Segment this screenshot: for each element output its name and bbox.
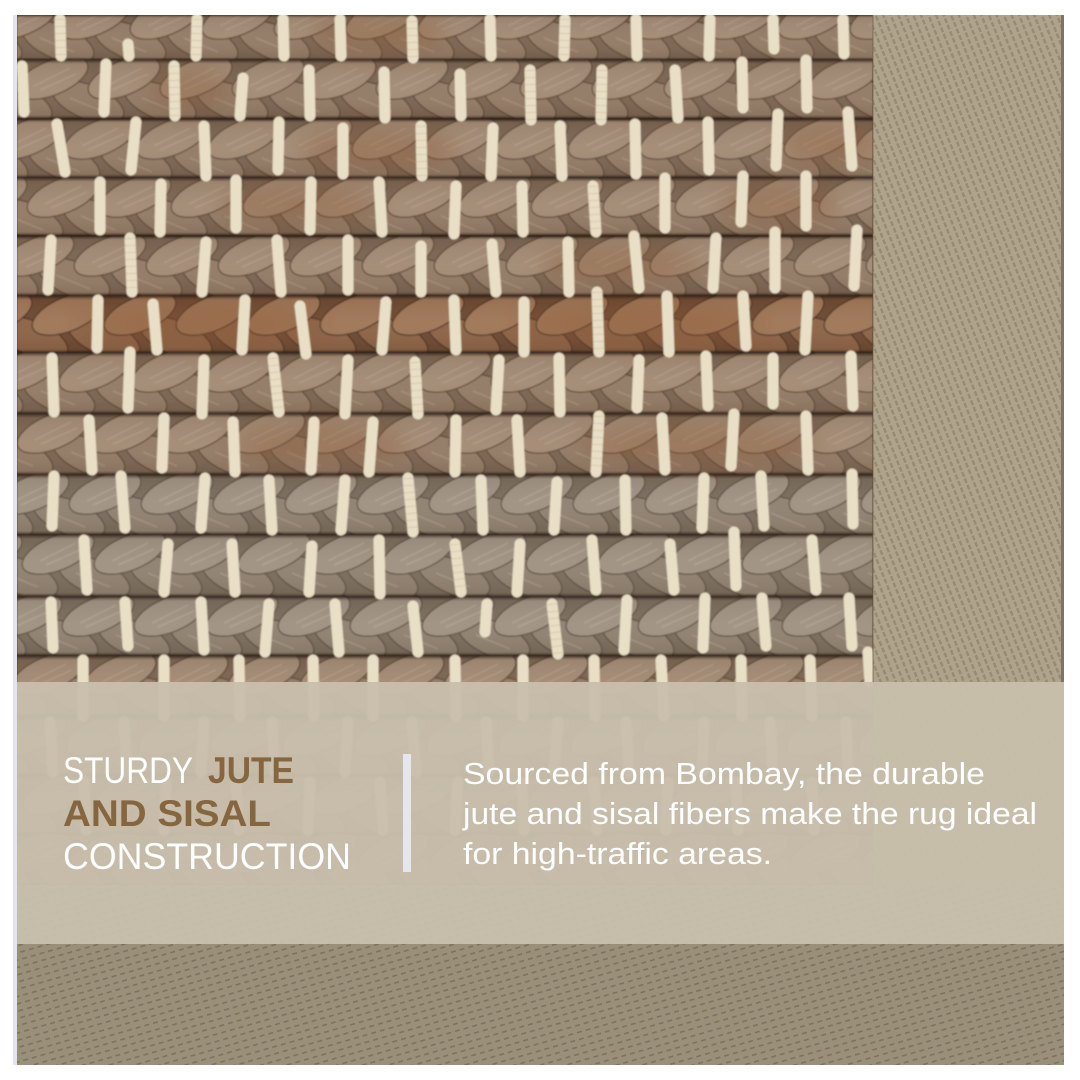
bottom fabric border xyxy=(17,860,1064,1065)
left edge strip xyxy=(13,15,17,1065)
description line 3: for high-traffic areas. xyxy=(463,836,772,871)
description line 1: Sourced from Bombay, the durable xyxy=(463,756,985,791)
description line 2: jute and sisal fibers make the rug ideal xyxy=(462,796,1037,831)
description text xyxy=(462,756,1037,871)
rug and border seam xyxy=(872,15,874,682)
heading line 1 brown: JUTE xyxy=(208,750,294,791)
stitch twist marks xyxy=(60,19,602,654)
heading: sturdy jute and sisal construction xyxy=(63,750,351,877)
right fabric border xyxy=(873,15,1064,885)
heading line 3 white: CONSTRUCTION xyxy=(63,836,351,877)
cream stitches xyxy=(17,15,873,682)
colour variation patches xyxy=(80,17,880,467)
braid rows xyxy=(17,15,873,682)
vertical divider xyxy=(403,754,411,872)
heading line 2 brown: AND SISAL xyxy=(63,793,271,834)
heading line 1 white: STURDY xyxy=(63,750,193,791)
woven jute rug xyxy=(17,15,880,885)
row shading xyxy=(17,15,873,660)
caption panel xyxy=(17,682,1064,944)
